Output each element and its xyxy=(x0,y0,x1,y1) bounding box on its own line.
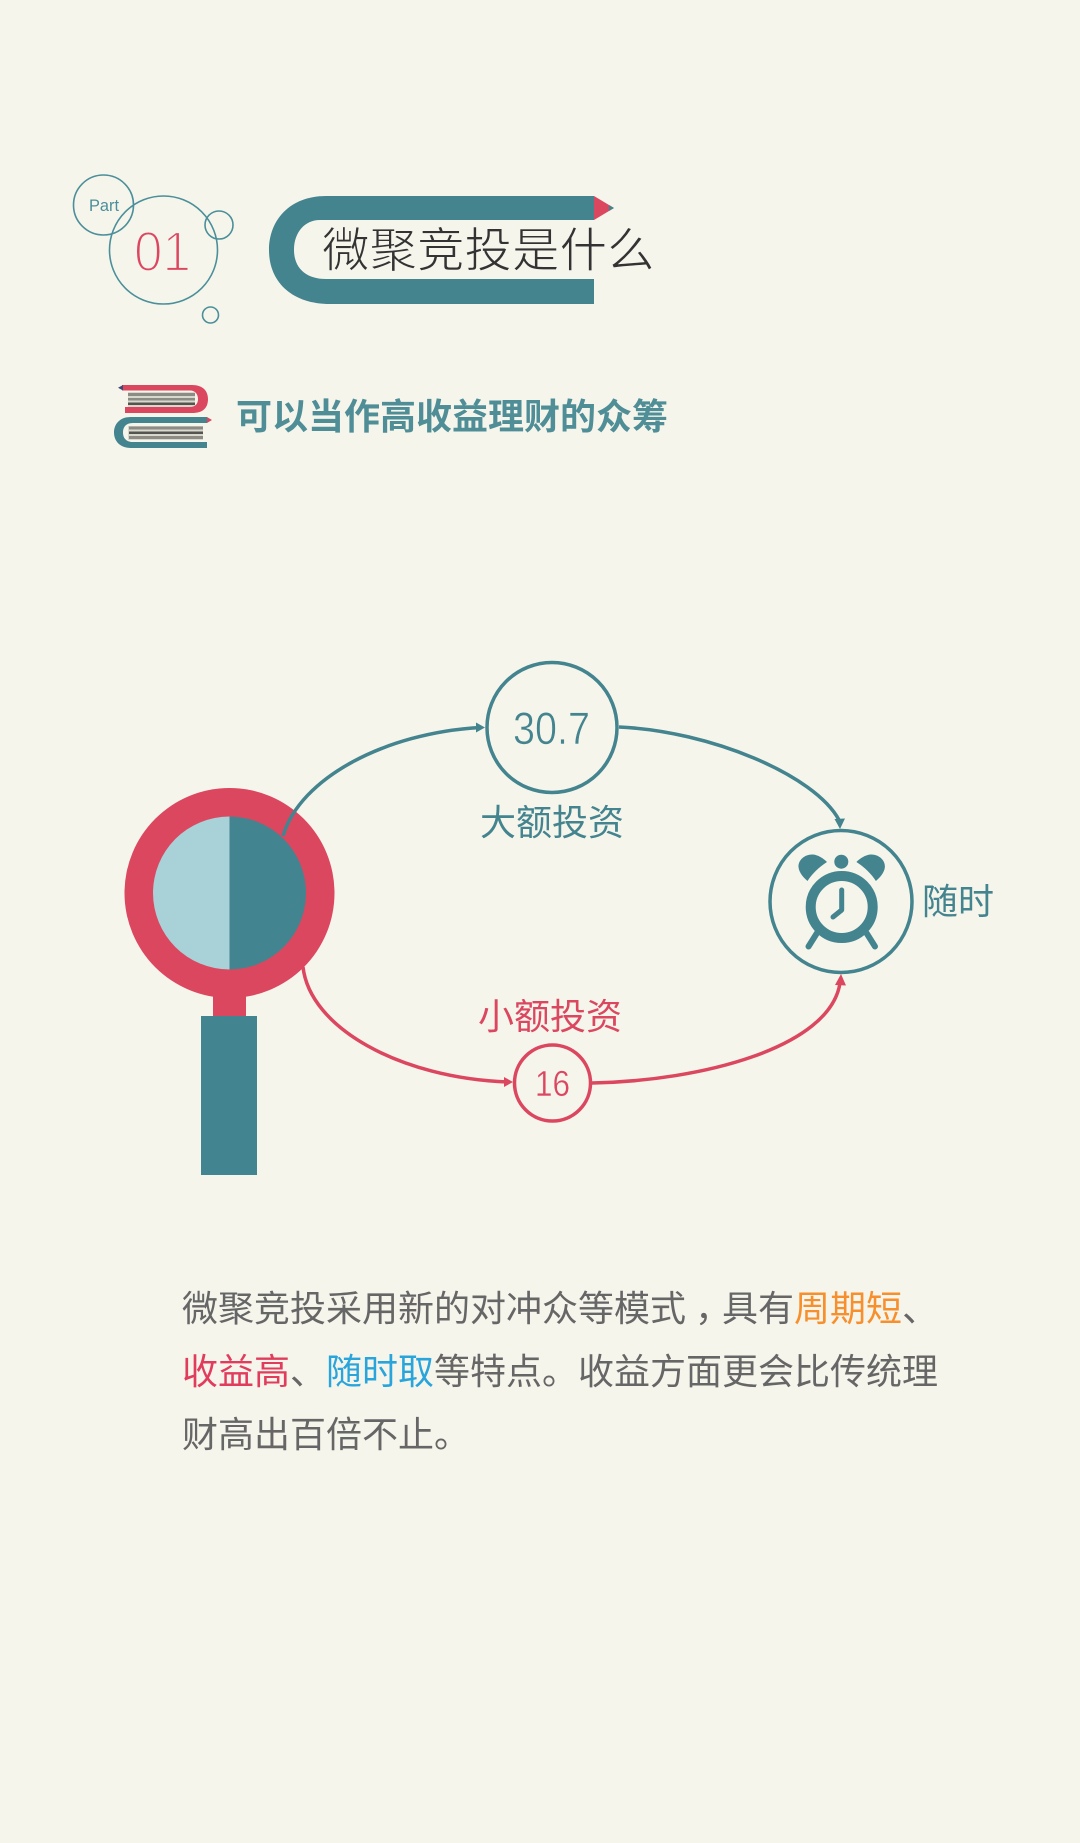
circle: 16: 16 xyxy=(535,1063,570,1104)
circle: 30.7 xyxy=(487,662,617,792)
section number badge: Part 01 bubbles xyxy=(74,175,233,323)
icon: stacked books xyxy=(114,385,212,448)
label: small investment: 小额投资 xyxy=(478,988,622,1040)
arrow: 30.7 to clock xyxy=(619,727,845,829)
section number badge: Part 01 bubbles: 01 xyxy=(134,220,191,284)
arrow: 16 to clock xyxy=(592,974,846,1083)
icon: magnifying glass xyxy=(124,788,334,1175)
label: large investment: 大额投资 xyxy=(480,794,624,846)
title text: 微聚竞投是什么 xyxy=(322,212,654,281)
body paragraph: 收益高、随时取等特点。收益方面更会比传统理 xyxy=(182,1343,938,1395)
arrow: magnifier to 16 xyxy=(303,967,513,1087)
body paragraph: 财高出百倍不止。 xyxy=(182,1406,470,1458)
circle: 30.7: 30.7 xyxy=(513,703,590,754)
body paragraph xyxy=(182,1280,938,1458)
circle: 16 xyxy=(514,1045,590,1121)
body paragraph: 微聚竞投采用新的对冲众等模式，具有周期短、 xyxy=(182,1280,938,1332)
section number badge: Part 01 bubbles: Part xyxy=(89,196,119,215)
title banner: pencil shape xyxy=(269,196,614,304)
icon: alarm clock in circle xyxy=(770,830,912,972)
subtitle: 可以当作高收益理财的众筹 xyxy=(236,388,668,440)
label: anytime: 随时 xyxy=(922,873,994,925)
arrow: magnifier to 30.7 xyxy=(283,722,485,836)
